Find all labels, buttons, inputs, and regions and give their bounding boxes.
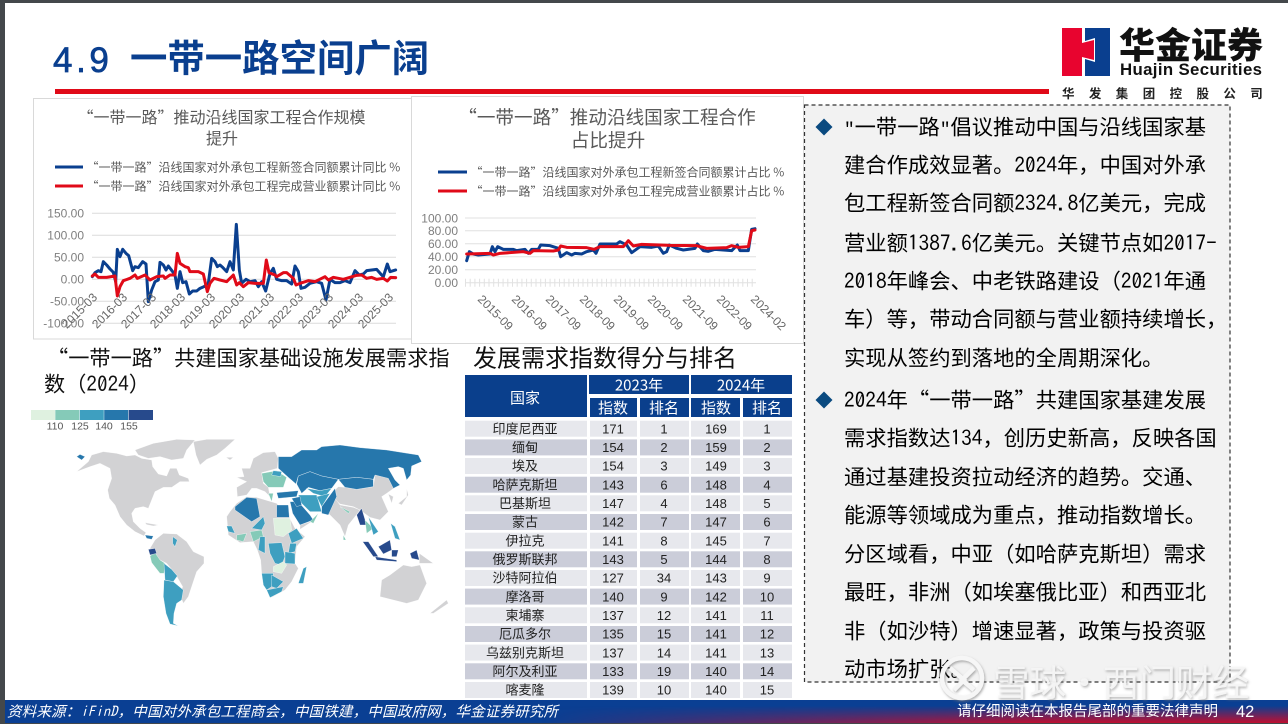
row	[465, 474, 792, 493]
map legend: 125	[71, 420, 89, 432]
text block: paragraph 2: 能源等领域成为重点，推动指数增长。	[844, 498, 1206, 530]
y axis labels: -50.00	[50, 294, 84, 308]
text block: paragraph 1: 营业额1387.6亿美元。关键节点如2017-	[844, 226, 1217, 258]
x axis labels: 2021-09	[680, 292, 721, 333]
x axis labels: 2020-03	[206, 290, 247, 331]
row: 149	[705, 459, 727, 474]
x axis labels: 2015-03	[59, 290, 100, 331]
row	[465, 642, 792, 661]
row: 2	[660, 440, 668, 455]
text block: paragraph 2: 最旺，非洲（如埃塞俄比亚）和西亚北	[844, 576, 1206, 606]
row: 6	[660, 477, 668, 492]
row: 144	[705, 552, 727, 567]
text block: paragraph 2	[844, 384, 1217, 684]
row: 140	[602, 589, 624, 604]
panel: key takeaways	[804, 105, 1230, 684]
text block: paragraph 2: 通过基建投资拉动经济的趋势。交通、	[844, 460, 1206, 492]
table header	[465, 374, 792, 418]
row: 14	[760, 664, 774, 679]
row: 喀麦隆	[505, 680, 545, 699]
y axis labels: 100.00	[421, 212, 458, 226]
row: 143	[602, 552, 624, 567]
map legend: 140	[95, 420, 113, 432]
row	[465, 493, 792, 512]
row	[465, 437, 792, 456]
heading: map: 数（2024）	[44, 368, 150, 398]
legal note: 请仔细阅读在本报告尾部的重要法律声明	[957, 700, 1218, 721]
x axis labels: 2018-09	[577, 292, 618, 333]
logo: Huajin Securities: 华金证券	[1119, 17, 1263, 69]
y axis labels: 20.00	[428, 263, 458, 277]
row: 147	[705, 515, 727, 530]
text block: paragraph 2: 非（如沙特）增速显著，政策与投资驱	[844, 614, 1206, 646]
row: 127	[602, 571, 624, 586]
row: 1	[660, 421, 668, 436]
icon: watermark logo	[942, 658, 982, 698]
logo: Huajin Securities: Huajin Securities	[1120, 60, 1262, 79]
y axis labels	[421, 212, 458, 290]
row: 10	[657, 683, 671, 698]
x axis labels: 2016-09	[509, 292, 550, 333]
table header: 排名	[649, 397, 679, 418]
source note: 资料来源：iFinD，中国对外承包工程商会，中国铁建，中国政府网，华金证券研究所	[7, 700, 560, 722]
row	[465, 418, 792, 437]
x axis labels: 2022-03	[265, 290, 306, 331]
row: 159	[705, 440, 727, 455]
x axis labels: 2020-09	[645, 292, 686, 333]
row	[465, 568, 792, 587]
y axis labels: 60.00	[428, 237, 458, 251]
row	[465, 624, 792, 643]
row: 141	[705, 627, 727, 642]
y axis labels: -100.00	[43, 316, 84, 330]
row: 141	[602, 533, 624, 548]
row	[465, 456, 792, 475]
x axis labels: 2021-03	[236, 290, 277, 331]
text block: paragraph 1: 车）等，带动合同额与营业额持续增长，	[844, 302, 1227, 334]
row: 148	[705, 496, 727, 511]
page number: 42	[1236, 703, 1254, 721]
line series	[467, 229, 755, 261]
legend	[55, 158, 400, 194]
row: 沙特阿拉伯	[492, 568, 558, 587]
icon: diamond bullet	[816, 392, 832, 408]
row	[465, 549, 792, 568]
row	[465, 530, 792, 549]
row: 137	[602, 608, 624, 623]
row: 3	[660, 459, 668, 474]
row: 乌兹别克斯坦	[486, 642, 564, 661]
row: 19	[657, 664, 671, 679]
row: 2	[763, 440, 771, 455]
row: 埃及	[512, 456, 538, 475]
chart title: “一带一路”推动沿线国家工程合作	[458, 103, 756, 130]
row: 厄瓜多尔	[499, 624, 551, 643]
icon: diamond bullet	[816, 118, 832, 136]
row: 摩洛哥	[505, 586, 545, 605]
row: 140	[705, 683, 727, 698]
row: 缅甸	[512, 437, 538, 456]
row: 137	[602, 645, 624, 660]
row: 171	[602, 421, 624, 436]
row	[465, 680, 792, 699]
row: 11	[760, 608, 774, 623]
row: 143	[705, 571, 727, 586]
row: 145	[705, 533, 727, 548]
x axis labels: 2025-03	[355, 290, 396, 331]
y axis labels: 40.00	[428, 250, 458, 264]
row: 7	[763, 533, 771, 548]
table header: 2024年	[717, 374, 765, 396]
row: 12	[657, 608, 671, 623]
chart title: “一带一路”推动沿线国家工程合作规模	[77, 104, 366, 128]
row: 4	[763, 477, 771, 492]
text block: paragraph 1: 实现从签约到落地的全周期深化。	[844, 342, 1163, 372]
row: 3	[763, 459, 771, 474]
x axis labels: 2019-03	[177, 290, 218, 331]
x axis labels	[59, 290, 396, 331]
chart title	[77, 104, 366, 149]
row: 8	[660, 533, 668, 548]
legend: “一带一路”沿线国家对外承包工程完成营业额累计同比 %	[86, 178, 400, 194]
x axis labels: 2015-09	[475, 292, 516, 333]
row: 8	[763, 552, 771, 567]
y axis labels: 50.00	[54, 250, 84, 264]
row: 147	[602, 496, 624, 511]
map legend: 155	[120, 420, 138, 432]
legend	[438, 164, 784, 200]
legend: “一带一路”沿线国家对外承包工程完成营业额累计占比 %	[470, 182, 784, 200]
map legend: 110	[47, 420, 64, 432]
row: 7	[660, 515, 668, 530]
x axis labels: 2016-03	[89, 290, 130, 331]
x axis labels: 2023-03	[295, 290, 336, 331]
x axis labels: 2024-03	[325, 290, 366, 331]
heading: map: “一带一路”共建国家基础设施发展需求指	[47, 342, 450, 372]
row	[465, 586, 792, 605]
table: demand index score and rank	[465, 374, 792, 699]
row: 139	[602, 683, 624, 698]
x axis labels: 2019-09	[611, 292, 652, 333]
text block: paragraph 2: 2024年“一带一路”共建国家基建发展	[844, 384, 1206, 414]
chart title	[458, 103, 756, 153]
map legend	[31, 410, 153, 432]
icon: logo mark	[1062, 28, 1110, 76]
row: 169	[705, 421, 727, 436]
x axis labels: 2017-03	[118, 290, 159, 331]
row: 9	[763, 571, 771, 586]
legend: “一带一路”沿线国家对外承包工程新签合同额累计同比 %	[86, 158, 400, 176]
text block: paragraph 2: 分区域看，中亚（如哈萨克斯坦）需求	[844, 538, 1206, 568]
line series	[92, 224, 396, 302]
row: 133	[602, 664, 624, 679]
text block: paragraph 2: 需求指数达134，创历史新高，反映各国	[844, 422, 1217, 452]
title: 一带一路空间广阔	[130, 28, 429, 82]
row	[465, 512, 792, 531]
x axis labels: 2017-09	[543, 292, 584, 333]
y axis labels: 150.00	[47, 206, 84, 220]
row: 印度尼西亚	[492, 418, 558, 437]
table header: 2023年	[615, 374, 663, 396]
table header: 指数	[701, 397, 731, 418]
row: 143	[602, 477, 624, 492]
footer bar	[0, 700, 1288, 724]
y axis labels: 100.00	[47, 228, 84, 242]
row: 1	[763, 421, 771, 436]
row: 9	[660, 589, 668, 604]
row: 巴基斯坦	[499, 493, 551, 512]
watermark: 雪球·西门财经	[993, 654, 1249, 707]
x axis labels	[475, 292, 789, 333]
chart title: 提升	[206, 125, 238, 149]
row: 4	[660, 496, 668, 511]
row: 135	[602, 627, 624, 642]
text block: paragraph 1: 2018年峰会、中老铁路建设（2021年通	[844, 264, 1206, 296]
table header: 指数	[598, 397, 628, 418]
row: 14	[657, 645, 671, 660]
row: 6	[763, 515, 771, 530]
text block: paragraph 1	[844, 110, 1227, 372]
row: 141	[705, 608, 727, 623]
row: 142	[602, 515, 624, 530]
row: 5	[763, 496, 771, 511]
text block: paragraph 2: 动市场扩张。	[844, 652, 972, 684]
row: 141	[705, 645, 727, 660]
logo: Huajin Securities: 华发集团控股公司	[1062, 83, 1277, 102]
text block: paragraph 1: 建合作成效显著。2024年，中国对外承	[844, 148, 1206, 180]
row: 蒙古	[512, 512, 538, 531]
row: 142	[705, 589, 727, 604]
x axis labels: 2022-09	[714, 292, 755, 333]
row: 柬埔寨	[505, 605, 545, 624]
row: 34	[657, 571, 671, 586]
text block: paragraph 1: 包工程新签合同额2324.8亿美元，完成	[844, 186, 1206, 218]
row: 10	[760, 589, 774, 604]
y axis labels	[43, 206, 84, 330]
row: 俄罗斯联邦	[492, 549, 558, 568]
row: 154	[602, 440, 624, 455]
row: 15	[657, 627, 671, 642]
row: 140	[705, 664, 727, 679]
heading: map	[44, 342, 450, 398]
heading: table: 发展需求指数得分与排名	[473, 338, 737, 374]
panel: chart contract growth	[34, 98, 412, 339]
row: 哈萨克斯坦	[492, 474, 558, 493]
row	[465, 661, 792, 680]
row: 15	[760, 683, 774, 698]
row: 伊拉克	[505, 530, 545, 549]
y axis labels: 80.00	[428, 224, 458, 238]
table header: 国家	[510, 387, 540, 408]
row	[465, 605, 792, 624]
world map	[77, 439, 448, 626]
table header: 排名	[752, 397, 782, 418]
text block: paragraph 1: "一带一路"倡议推动中国与沿线国家基	[844, 110, 1206, 142]
row: 148	[705, 477, 727, 492]
title: 4.9	[53, 41, 112, 80]
panel: chart share growth	[412, 96, 804, 344]
row: 12	[760, 627, 774, 642]
x axis labels: 2018-03	[147, 290, 188, 331]
logo: Huajin Securities	[1062, 17, 1277, 102]
row: 154	[602, 459, 624, 474]
chart title: 占比提升	[571, 126, 645, 153]
row: 阿尔及利亚	[492, 661, 558, 680]
legend: “一带一路”沿线国家对外承包工程新签合同额累计占比 %	[470, 164, 784, 180]
row: 5	[660, 552, 668, 567]
y axis labels: 0.00	[61, 272, 84, 286]
x axis labels: 2024-02	[748, 292, 789, 333]
row: 13	[760, 645, 774, 660]
y axis labels: 0.00	[435, 276, 458, 290]
